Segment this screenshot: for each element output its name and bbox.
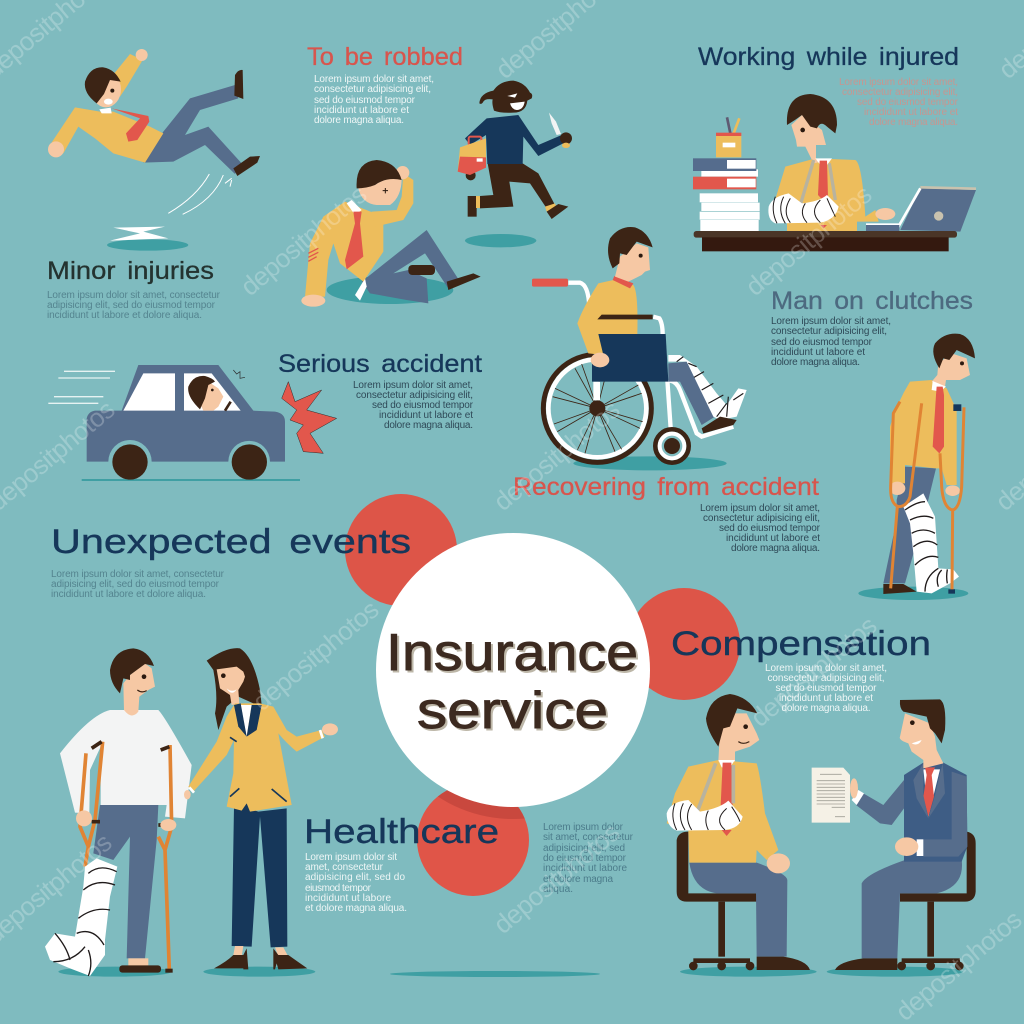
panel text: healthcare side note: adipisicing elit, sed [543, 843, 625, 854]
figure: man with arm cast seated [667, 694, 817, 977]
panel text: recovering from accident: dolore magna aliqua. [731, 543, 820, 554]
panel text: working while injured: sed do eiusmod tempor [857, 97, 959, 108]
icon: laptop [866, 187, 976, 232]
figure: robber running with briefcase and knife [458, 81, 572, 247]
panel text: working while injured [698, 43, 959, 128]
panel text: to be robbed: consectetur adipisicing elit, [314, 84, 431, 95]
icon: crash burst [282, 382, 337, 453]
watermarks: depositphotos [247, 594, 385, 717]
panel text: recovering from accident: Lorem ipsum dolor sit amet, [700, 503, 820, 514]
figure: woman in yellow jacket [184, 648, 338, 977]
watermarks: depositphotos [740, 179, 878, 302]
figure: man sitting injured on the ground [301, 160, 481, 307]
figure: man in wheelchair [532, 227, 747, 470]
watermarks: depositphotos [488, 817, 626, 940]
icon: pencil pot [716, 117, 741, 157]
panel text: serious accident: Serious accident [278, 350, 482, 378]
panel text: healthcare side note: Lorem ipsum dolor [543, 822, 624, 833]
panel text: healthcare: adipisicing elit, sed do [305, 872, 405, 883]
chair [897, 832, 976, 970]
panel text: healthcare: eiusmod tempor [305, 883, 372, 894]
title: Insurance service: Insurance [386, 624, 638, 682]
panel text: healthcare side note: do eiusmod tempor [543, 853, 627, 864]
figure: man working at desk with arm in cast [693, 94, 976, 251]
panel text: healthcare side note: sit amet, consectetur [543, 832, 634, 843]
panel text: to be robbed: To be robbed [307, 43, 463, 71]
panel text: healthcare side note: incididunt ut labore [543, 863, 627, 874]
panel text: man on clutches: Man on clutches [771, 287, 973, 315]
watermarks: depositphotos [235, 179, 373, 302]
panel text: recovering from accident: incididunt ut labore et [726, 533, 820, 544]
panel text: healthcare: Healthcare [304, 813, 499, 851]
panel text: to be robbed: dolore magna aliqua. [314, 115, 404, 126]
figure: man on crutches with leg cast [858, 334, 975, 600]
panel text: compensation: dolore magna aliqua. [782, 703, 870, 714]
figure: man with leg cast on crutches [45, 648, 192, 977]
panel text: healthcare side note: aliqua. [543, 884, 573, 895]
panel text: compensation: incididunt ut labore et [779, 693, 873, 704]
panel text: unexpected events: Unexpected events [51, 523, 411, 561]
panel text: recovering from accident [513, 473, 821, 554]
central circles [345, 494, 740, 896]
panel text: to be robbed: incididunt ut labore et [314, 105, 409, 116]
panel text: unexpected events: Lorem ipsum dolor sit amet, consectetur [51, 569, 225, 580]
panel text: healthcare: et dolore magna aliqua. [305, 903, 407, 914]
icon: stack of books [693, 158, 760, 232]
panel text: recovering from accident: Recovering from accident [513, 473, 819, 501]
panel text: man on clutches: Lorem ipsum dolor sit amet, [771, 316, 891, 327]
panel text: compensation: consectetur adipisicing elit, [768, 673, 884, 684]
figure: man slipping [48, 49, 260, 251]
panel text: minor injuries: incididunt ut labore et dolore aliqua. [47, 310, 202, 321]
panel text: serious accident: consectetur adipisicing elit, [356, 390, 473, 401]
desk [694, 231, 957, 251]
panel text: minor injuries: adipisicing elit, sed do eiusmod tempor [47, 300, 216, 311]
panel text: healthcare side note: et dolore magna [543, 874, 613, 885]
panel text: recovering from accident: consectetur adipisicing elit, [703, 513, 820, 524]
ground shadow line [390, 971, 600, 977]
panel text: healthcare side note [543, 822, 634, 895]
panel text: working while injured: Lorem ipsum dolor sit amet, [839, 77, 958, 88]
panel text: compensation: sed do eiusmod tempor [776, 683, 877, 694]
panel text: man on clutches: consectetur adipisicing elit, [771, 326, 887, 337]
panel text: man on clutches [771, 287, 973, 368]
panel text: healthcare: incididunt ut labore [305, 893, 391, 904]
panel text: serious accident: incididunt ut labore et [379, 410, 473, 421]
panel text: man on clutches: incididunt ut labore et [771, 347, 865, 358]
panel text: minor injuries [47, 257, 221, 321]
panel text: healthcare: amet, consectetur [305, 862, 384, 873]
panel text: recovering from accident: sed do eiusmod tempor [719, 523, 821, 534]
panel text: man on clutches: sed do eiusmod tempor [771, 337, 873, 348]
panel text: healthcare: Lorem ipsum dolor sit [305, 852, 397, 863]
title: Insurance service: service [417, 682, 608, 740]
watermarks: depositphotos [488, 394, 626, 517]
man [768, 94, 895, 232]
panel text: serious accident [278, 350, 482, 431]
panel text: minor injuries: Lorem ipsum dolor sit amet, consectetur [47, 290, 221, 301]
figure: agent in suit holding document [812, 699, 976, 977]
chair [677, 832, 757, 970]
panel text: to be robbed: Lorem ipsum dolor sit amet, [314, 74, 434, 85]
panel text: healthcare [304, 813, 499, 914]
figure: car crash [48, 365, 337, 480]
panel text: serious accident: sed do eiusmod tempor [372, 400, 474, 411]
panel text: working while injured: incididunt ut labore et [864, 107, 958, 118]
panel text: serious accident: Lorem ipsum dolor sit amet, [353, 380, 473, 391]
document [812, 768, 850, 823]
panel text: compensation [671, 625, 931, 714]
panel text: minor injuries: Minor injuries [47, 257, 214, 285]
panel text: man on clutches: dolore magna aliqua. [771, 357, 860, 368]
panel text: working while injured: Working while injured [698, 43, 959, 71]
title: Insurance service: service [419, 684, 610, 742]
title: Insurance service: Insurance [388, 626, 640, 684]
panel text: unexpected events: incididunt ut labore et dolore aliqua. [51, 589, 206, 600]
watermarks: depositphotos [745, 610, 883, 733]
panel text: working while injured: dolore magna aliqua. [869, 117, 958, 128]
panel text: unexpected events [51, 523, 411, 600]
panel text: to be robbed [307, 43, 463, 126]
title: Insurance service [386, 624, 640, 742]
panel text: unexpected events: adipisicing elit, sed do eiusmod tempor [51, 579, 220, 590]
panel text: to be robbed: sed do eiusmod tempor [314, 95, 416, 106]
panel text: working while injured: consectetur adipisicing elit, [842, 87, 958, 98]
panel text: compensation: Compensation [671, 625, 931, 663]
panel text: serious accident: dolore magna aliqua. [384, 420, 473, 431]
panel text: compensation: Lorem ipsum dolor sit amet, [765, 663, 887, 674]
wheel [543, 354, 651, 462]
